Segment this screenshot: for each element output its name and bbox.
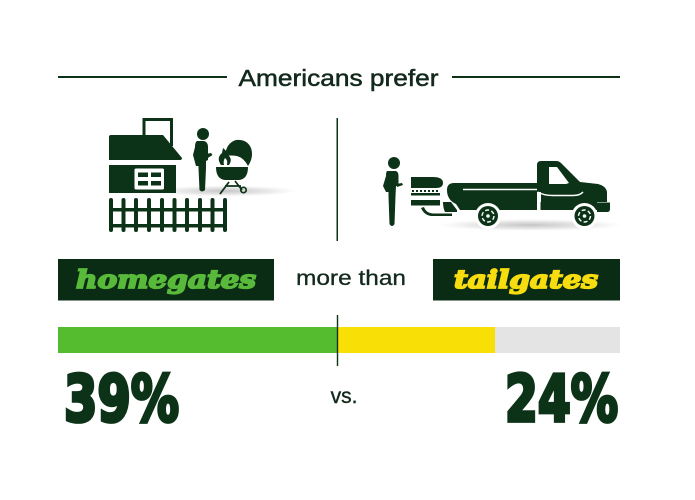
window [134,168,164,190]
grill [216,140,252,194]
label: homegates [58,259,274,300]
truck cab [537,161,607,210]
wheels [475,203,598,229]
label: homegates: homegates [76,265,256,294]
ground shadow [153,186,297,196]
truck bed [447,183,537,210]
sandwich [411,177,452,216]
front bumper [597,202,610,212]
stacked bar [58,315,620,366]
fence [109,198,227,232]
center divider [336,118,338,241]
tail light [443,202,457,212]
person with sandwich [383,157,403,226]
label: tailgates: tailgates [454,265,598,294]
truck shadow [438,219,622,231]
cab details [549,167,569,184]
text: more than: more than [296,267,406,290]
roof [109,135,182,160]
icon: person, food and pickup truck [383,157,622,231]
title: Americans prefer [238,65,439,91]
person at grill [193,128,212,192]
icon: house, person and grill [109,120,297,232]
text: vs.: vs. [331,385,357,408]
label: tailgates [433,259,620,300]
house body [109,165,176,193]
stat: 39%: 39% [64,363,179,437]
stat: 24%: 24% [505,363,618,437]
chimney [144,120,172,146]
